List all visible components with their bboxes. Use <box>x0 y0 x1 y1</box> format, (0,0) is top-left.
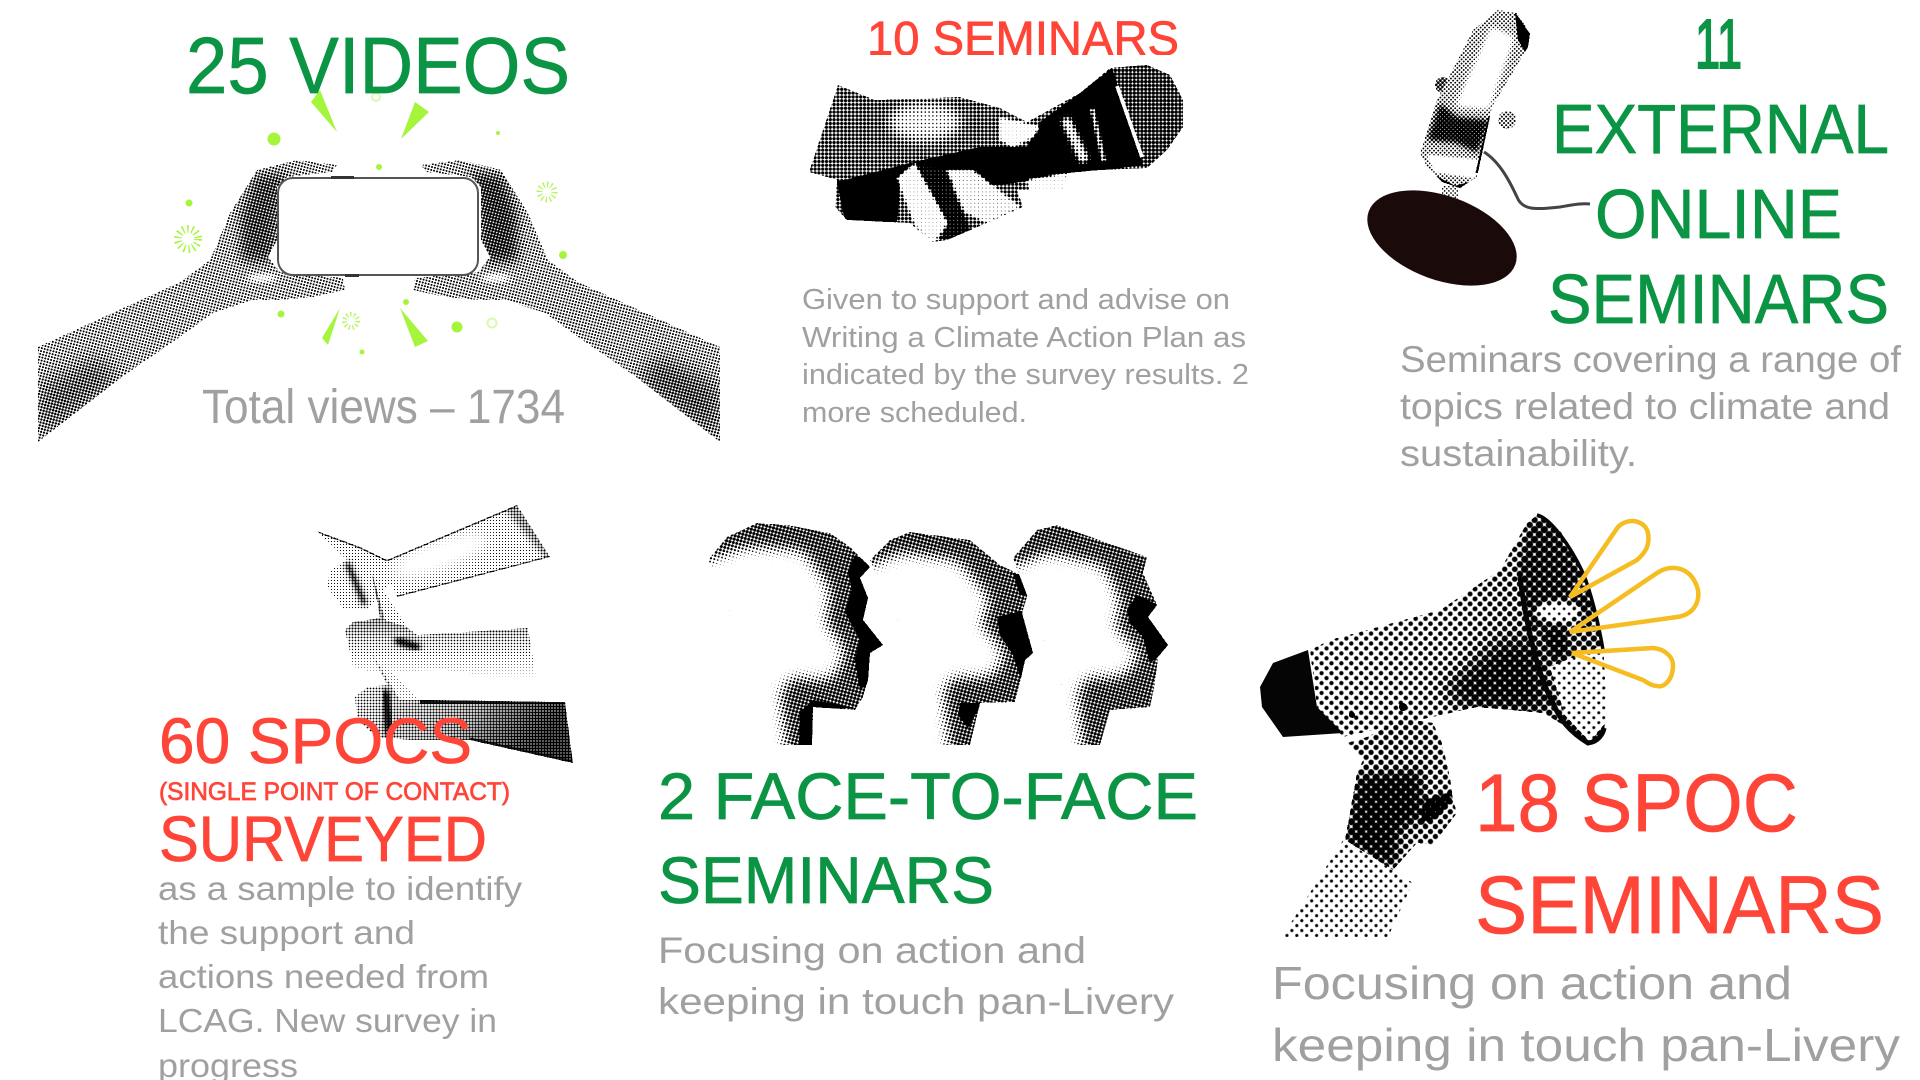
heading <box>1548 5 1889 338</box>
panel: 60 SPOCs surveyed <box>158 500 580 1080</box>
body text: keeping in touch pan-Livery <box>658 981 1175 1022</box>
middle hand <box>340 570 540 680</box>
heading: SEMINARS <box>658 843 994 917</box>
heading: ONLINE <box>1595 175 1842 253</box>
panel: 11 external online seminars <box>1354 0 1902 474</box>
text: total views: Total views – 1734 <box>202 381 565 434</box>
back cap and rim <box>1260 515 1604 743</box>
sound loops <box>1570 521 1698 686</box>
body text <box>658 930 1175 1022</box>
heading: SEMINARS <box>1548 260 1889 338</box>
cable <box>1484 152 1590 209</box>
subheading: (SINGLE POINT OF CONTACT) <box>159 778 510 806</box>
top hand <box>318 505 550 608</box>
sleeve <box>1282 840 1413 937</box>
heading: SEMINARS <box>1475 860 1884 951</box>
body text <box>1400 339 1902 474</box>
heading: 60 SPOCS <box>159 705 472 777</box>
icon: hand holding microphone <box>810 55 1183 242</box>
heading: 10 SEMINARS <box>867 13 1179 66</box>
body text: more scheduled. <box>802 397 1027 429</box>
body text: as a sample to identify <box>158 870 523 907</box>
halftone body and hand <box>1270 510 1620 940</box>
icon: megaphone <box>1260 510 1698 940</box>
body text: keeping in touch pan-Livery <box>1272 1019 1900 1071</box>
heading: SURVEYED <box>159 803 487 875</box>
icon: lime burst <box>178 90 567 354</box>
icon: three head silhouettes <box>709 523 1168 745</box>
heading: 2 FACE-TO-FACE <box>658 759 1198 833</box>
head 3 <box>1014 525 1168 745</box>
panel: 25 videos <box>30 21 730 450</box>
heading: 25 VIDEOS <box>186 21 570 110</box>
heading: 11 <box>1695 5 1742 83</box>
body text: the support and <box>158 914 415 951</box>
phone <box>278 176 478 277</box>
body text: LCAG. New survey in <box>158 1002 497 1039</box>
body text: Writing a Climate Action Plan as <box>802 322 1246 354</box>
heading <box>1475 758 1884 951</box>
microphone base <box>1354 172 1530 304</box>
body text: Focusing on action and <box>1272 957 1792 1009</box>
head 1 <box>709 523 883 745</box>
heading: 18 SPOC <box>1475 758 1798 849</box>
bottom hand <box>350 650 575 765</box>
head 2 <box>870 532 1033 745</box>
panel: 18 SPOC seminars <box>1260 510 1900 1071</box>
icon: thumbs up hands <box>310 500 580 770</box>
body text <box>802 284 1249 429</box>
body text: actions needed from <box>158 958 489 995</box>
body text: Seminars covering a range of <box>1400 339 1902 380</box>
microphone halftone <box>1420 10 1530 200</box>
body text: indicated by the survey results. 2 <box>802 359 1249 391</box>
panel: 2 face-to-face seminars <box>658 515 1198 1022</box>
panel: 10 seminars <box>800 13 1249 429</box>
body text <box>158 870 523 1080</box>
body text: sustainability. <box>1400 433 1637 474</box>
body text: Given to support and advise on <box>802 284 1230 316</box>
heading <box>658 759 1198 917</box>
icon: studio microphone <box>1367 10 1590 286</box>
icon: hands holding phone <box>30 150 730 450</box>
body text <box>1272 957 1900 1071</box>
halftone arms <box>30 150 730 450</box>
body text: topics related to climate and <box>1400 386 1890 427</box>
heading: EXTERNAL <box>1552 90 1889 168</box>
body text: Focusing on action and <box>658 930 1086 971</box>
